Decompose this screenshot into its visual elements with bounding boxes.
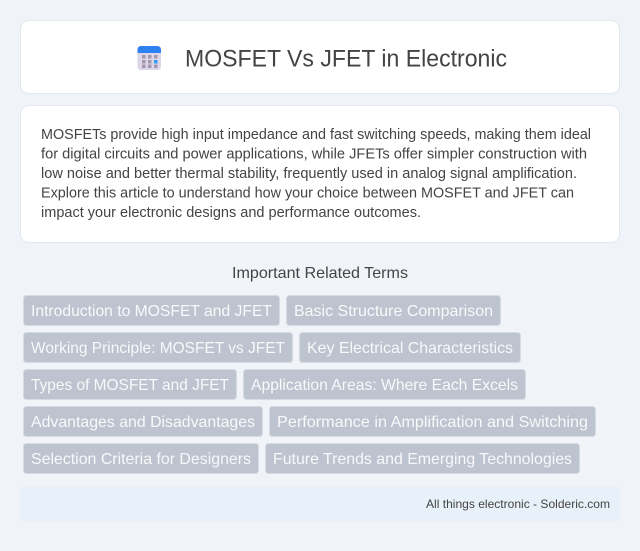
panel: summary paragraph: impact your electronic designs and performance outcomes. bbox=[41, 205, 421, 221]
panel: related term chips: Basic Structure Comparison bbox=[294, 303, 493, 320]
panel: related term chips bbox=[24, 296, 596, 474]
panel: related term chips: Working Principle: MOSFET vs JFET bbox=[31, 340, 285, 357]
icon: calendar bbox=[138, 46, 161, 70]
footer: All things electronic - Solderic.com bbox=[426, 497, 610, 511]
heading: related terms: Important Related Terms bbox=[232, 265, 408, 282]
panel: related term chips: Introduction to MOSFET and JFET bbox=[31, 303, 272, 320]
panel: summary paragraph: low noise and better thermal stability, frequently used in analog signal amplification. bbox=[41, 166, 577, 182]
panel: header bbox=[20, 20, 620, 94]
panel: summary paragraph: Explore this article to understand how your choice between MOSFET and JFET can bbox=[41, 186, 574, 202]
panel: summary paragraph: MOSFETs provide high input impedance and fast switching speeds, making them ideal bbox=[41, 127, 591, 143]
title: MOSFET Vs JFET in Electronic bbox=[185, 46, 507, 72]
footer bbox=[20, 487, 620, 521]
panel: related term chips: Performance in Amplification and Switching bbox=[277, 414, 588, 431]
panel: related term chips: Types of MOSFET and JFET bbox=[31, 377, 229, 394]
panel: related term chips: Application Areas: Where Each Excels bbox=[251, 377, 518, 394]
panel: summary paragraph bbox=[20, 106, 620, 242]
panel: related term chips: Advantages and Disadvantages bbox=[31, 414, 255, 431]
panel: related term chips: Selection Criteria for Designers bbox=[31, 451, 251, 468]
panel: summary paragraph: for digital circuits and power applications, while JFETs offer simpler construction with bbox=[41, 146, 587, 162]
panel: related term chips: Key Electrical Characteristics bbox=[307, 340, 513, 357]
panel: related term chips: Future Trends and Emerging Technologies bbox=[273, 451, 572, 468]
